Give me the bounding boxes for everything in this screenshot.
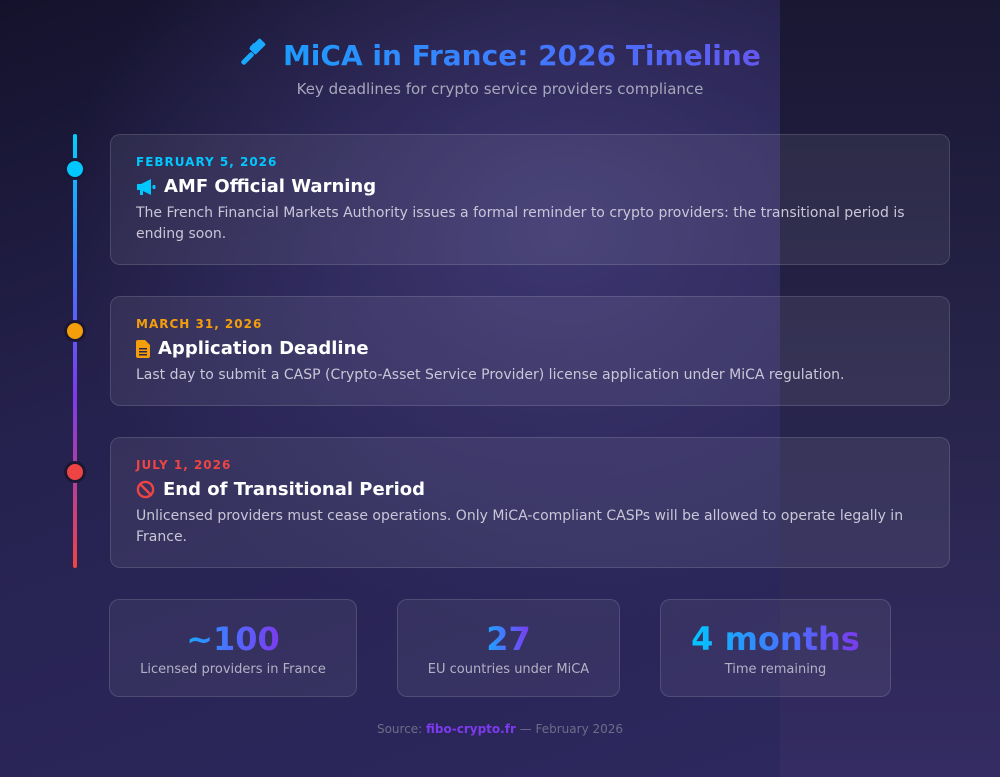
- stat 3: [660, 599, 891, 697]
- stat 1: ~100: [186, 620, 280, 658]
- card 3: [110, 437, 950, 568]
- icon: gavel: [241, 38, 266, 65]
- dot 3: [64, 461, 86, 483]
- card 1: The French Financial Markets Authority issues a formal reminder to crypto providers: the transitional period is ending soon.: [136, 205, 905, 242]
- title: MiCA in France: 2026 Timeline: [283, 39, 761, 72]
- source: Source: fibo-crypto.fr — February 2026: [377, 722, 623, 736]
- dot 2: [64, 320, 86, 342]
- card 2: [110, 296, 950, 406]
- stat 3: Time remaining: [725, 662, 826, 677]
- stat 1: [109, 599, 357, 697]
- card 2: Application Deadline: [158, 338, 369, 359]
- card 3: End of Transitional Period: [163, 479, 425, 500]
- card 3: JULY 1, 2026: [136, 458, 231, 472]
- card 1: FEBRUARY 5, 2026: [136, 155, 277, 169]
- stat 3: 4 months: [691, 620, 860, 658]
- card 1: [110, 134, 950, 265]
- card 2: Last day to submit a CASP (Crypto-Asset Service Provider) license application under MiCA regulation.: [136, 367, 844, 383]
- stat 2: EU countries under MiCA: [428, 662, 589, 677]
- dot 1: [64, 158, 86, 180]
- card 2: MARCH 31, 2026: [136, 317, 262, 331]
- card 3: Unlicensed providers must cease operations. Only MiCA-compliant CASPs will be allowed to operate legally in France.: [136, 508, 903, 545]
- stat 1: Licensed providers in France: [140, 662, 326, 677]
- card 1: AMF Official Warning: [164, 176, 376, 197]
- stat 2: [397, 599, 620, 697]
- subtitle: Key deadlines for crypto service providers compliance: [297, 80, 703, 98]
- timeline line: [73, 134, 77, 568]
- stat 2: 27: [486, 620, 531, 658]
